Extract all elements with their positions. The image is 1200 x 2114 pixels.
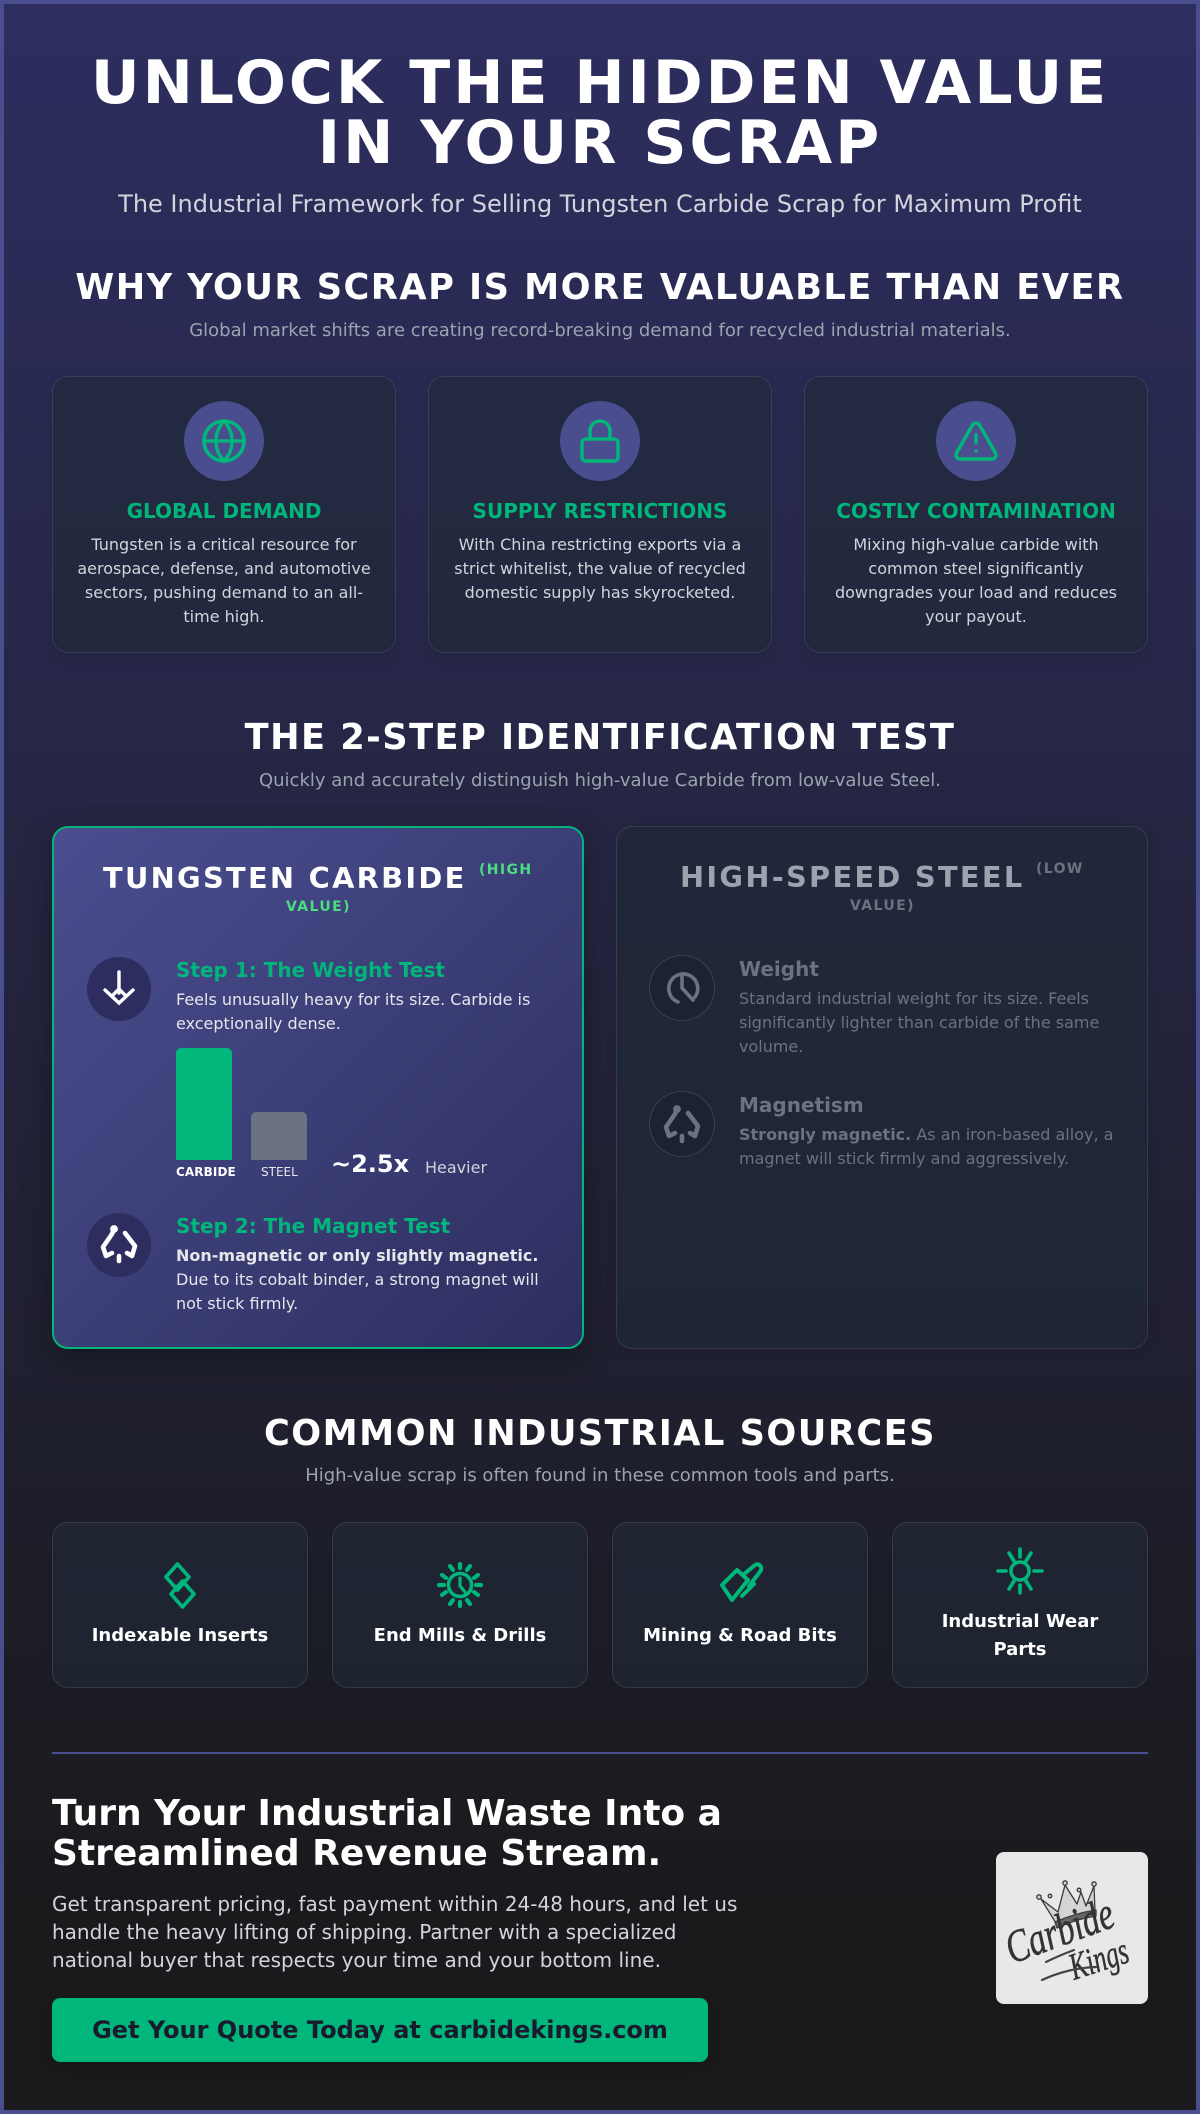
card text: sectors, pushing demand to an all- <box>85 583 363 602</box>
weight title: Weight <box>739 957 819 981</box>
cta text: Get transparent pricing, fast payment within 24-48 hours, and let us <box>52 1892 737 1916</box>
panel: high-speed steel <box>616 826 1148 1349</box>
panel: supply restrictions <box>428 376 772 653</box>
title <box>91 48 1109 178</box>
cta heading: Turn Your Industrial Waste Into a <box>52 1793 722 1834</box>
panel title <box>680 860 1084 914</box>
icon: end mill <box>436 1562 484 1608</box>
card text: Tungsten is a critical resource for <box>91 535 357 554</box>
title: UNLOCK THE HIDDEN VALUE <box>91 48 1109 118</box>
label: steel: STEEL <box>261 1165 298 1179</box>
panel title: (HIGH <box>479 862 533 878</box>
icon: road bit <box>720 1562 764 1602</box>
magnetism title: Magnetism <box>739 1093 864 1117</box>
weight text: significantly lighter than carbide of the same <box>739 1013 1099 1032</box>
heading: THE 2-STEP IDENTIFICATION TEST <box>245 717 955 758</box>
section heading: identification test <box>244 717 955 791</box>
cta heading <box>52 1793 722 1874</box>
logo: Carbide Kings <box>996 1852 1148 2004</box>
cta button: Get Your Quote Today at carbidekings.com <box>92 2016 668 2044</box>
header <box>91 48 1109 218</box>
label: Parts <box>993 1639 1047 1660</box>
source card: mining and road bits <box>612 1522 868 1688</box>
section heading: why valuable <box>75 267 1125 341</box>
card text: aerospace, defense, and automotive <box>77 559 371 578</box>
panel title: TUNGSTEN CARBIDE <box>103 861 467 895</box>
weight text <box>739 989 1099 1056</box>
card text: your payout. <box>925 607 1027 626</box>
cta text: handle the heavy lifting of shipping. Partner with a specialized <box>52 1920 677 1944</box>
card text <box>454 535 746 602</box>
cta text: national buyer that respects your time and your bottom line. <box>52 1948 661 1972</box>
card text: time high. <box>183 607 265 626</box>
card title: GLOBAL DEMAND <box>127 499 321 523</box>
label: End Mills & Drills <box>374 1625 546 1646</box>
label: Mining & Road Bits <box>643 1625 837 1646</box>
panel title: VALUE) <box>286 899 351 915</box>
card text: strict whitelist, the value of recycled <box>454 559 746 578</box>
card text: common steel significantly <box>868 559 1084 578</box>
section subtitle: High-value scrap is often found in these common tools and parts. <box>305 1465 895 1486</box>
section subtitle: Global market shifts are creating record-breaking demand for recycled industrial materials. <box>189 320 1011 341</box>
card title: COSTLY CONTAMINATION <box>836 499 1116 523</box>
icon: inserts <box>164 1562 196 1609</box>
swoosh <box>1042 1950 1096 1980</box>
magnetism text: magnet will stick firmly and aggressively. <box>739 1149 1069 1168</box>
subtitle: The Industrial Framework for Selling Tungsten Carbide Scrap for Maximum Profit <box>118 190 1082 218</box>
magnetism text <box>739 1125 1113 1168</box>
section subtitle: Quickly and accurately distinguish high-value Carbide from low-value Steel. <box>259 770 941 791</box>
icon: wear part <box>996 1547 1044 1595</box>
magnetism text: Strongly magnetic. As an iron-based alloy, a <box>739 1125 1113 1144</box>
step 1 title: Step 1: The Weight Test <box>176 958 445 982</box>
cta heading: Streamlined Revenue Stream. <box>52 1833 661 1874</box>
panel: tungsten carbide <box>52 826 584 1349</box>
step 2 text: not stick firmly. <box>176 1294 298 1313</box>
source card: end mills and drills <box>332 1522 588 1688</box>
label: Industrial Wear <box>942 1611 1098 1632</box>
label <box>942 1611 1098 1660</box>
card title: SUPPLY RESTRICTIONS <box>473 499 727 523</box>
logo wordmark <box>998 1887 1134 1989</box>
icon: warning triangle <box>936 401 1016 481</box>
card text: With China restricting exports via a <box>459 535 741 554</box>
crown <box>1037 1881 1096 1928</box>
step 2 icon: magnet <box>87 1213 151 1277</box>
card text <box>835 535 1117 626</box>
step 1 text <box>176 990 530 1033</box>
source card: industrial wear parts <box>892 1522 1148 1688</box>
magnetism icon <box>649 1091 715 1157</box>
stat: 2.5x: ~2.5x <box>331 1150 409 1178</box>
step 2 text: Due to its cobalt binder, a strong magnet will <box>176 1270 539 1289</box>
step 1 icon: weight <box>87 957 151 1021</box>
label: Indexable Inserts <box>92 1625 268 1646</box>
bar: steel <box>251 1112 307 1160</box>
heading: WHY YOUR SCRAP IS MORE VALUABLE THAN EVER <box>75 267 1125 308</box>
section heading: sources <box>264 1413 936 1486</box>
label: carbide: CARBIDE <box>176 1165 236 1179</box>
heading: COMMON INDUSTRIAL SOURCES <box>264 1413 936 1454</box>
step 2 text <box>176 1246 539 1313</box>
step 1 text: Feels unusually heavy for its size. Carbide is <box>176 990 530 1009</box>
panel title: VALUE) <box>850 898 915 914</box>
call to action <box>52 1793 737 2062</box>
cta text <box>52 1892 737 1972</box>
stat label: heavier: Heavier <box>425 1158 487 1177</box>
bar chart: density comparison <box>176 1048 488 1179</box>
weight text: volume. <box>739 1037 803 1056</box>
card text <box>77 535 371 626</box>
panel title: HIGH-SPEED STEEL <box>680 860 1024 894</box>
card text: downgrades your load and reduces <box>835 583 1117 602</box>
step 1 text: exceptionally dense. <box>176 1014 341 1033</box>
panel title <box>103 861 533 915</box>
icon: globe <box>184 401 264 481</box>
card text: domestic supply has skyrocketed. <box>465 583 735 602</box>
panel: costly contamination <box>804 376 1148 653</box>
source card: indexable inserts <box>52 1522 308 1688</box>
step 2 text: Non-magnetic or only slightly magnetic. <box>176 1246 538 1265</box>
bar: carbide <box>176 1048 232 1160</box>
card text: Mixing high-value carbide with <box>853 535 1099 554</box>
panel title: (LOW <box>1036 861 1084 877</box>
cta button <box>52 1998 708 2062</box>
weight text: Standard industrial weight for its size. Feels <box>739 989 1089 1008</box>
icon: lock <box>560 401 640 481</box>
step 2 title: Step 2: The Magnet Test <box>176 1214 450 1238</box>
panel: global demand <box>52 376 396 653</box>
title: IN YOUR SCRAP <box>318 108 882 178</box>
weight icon <box>649 955 715 1021</box>
